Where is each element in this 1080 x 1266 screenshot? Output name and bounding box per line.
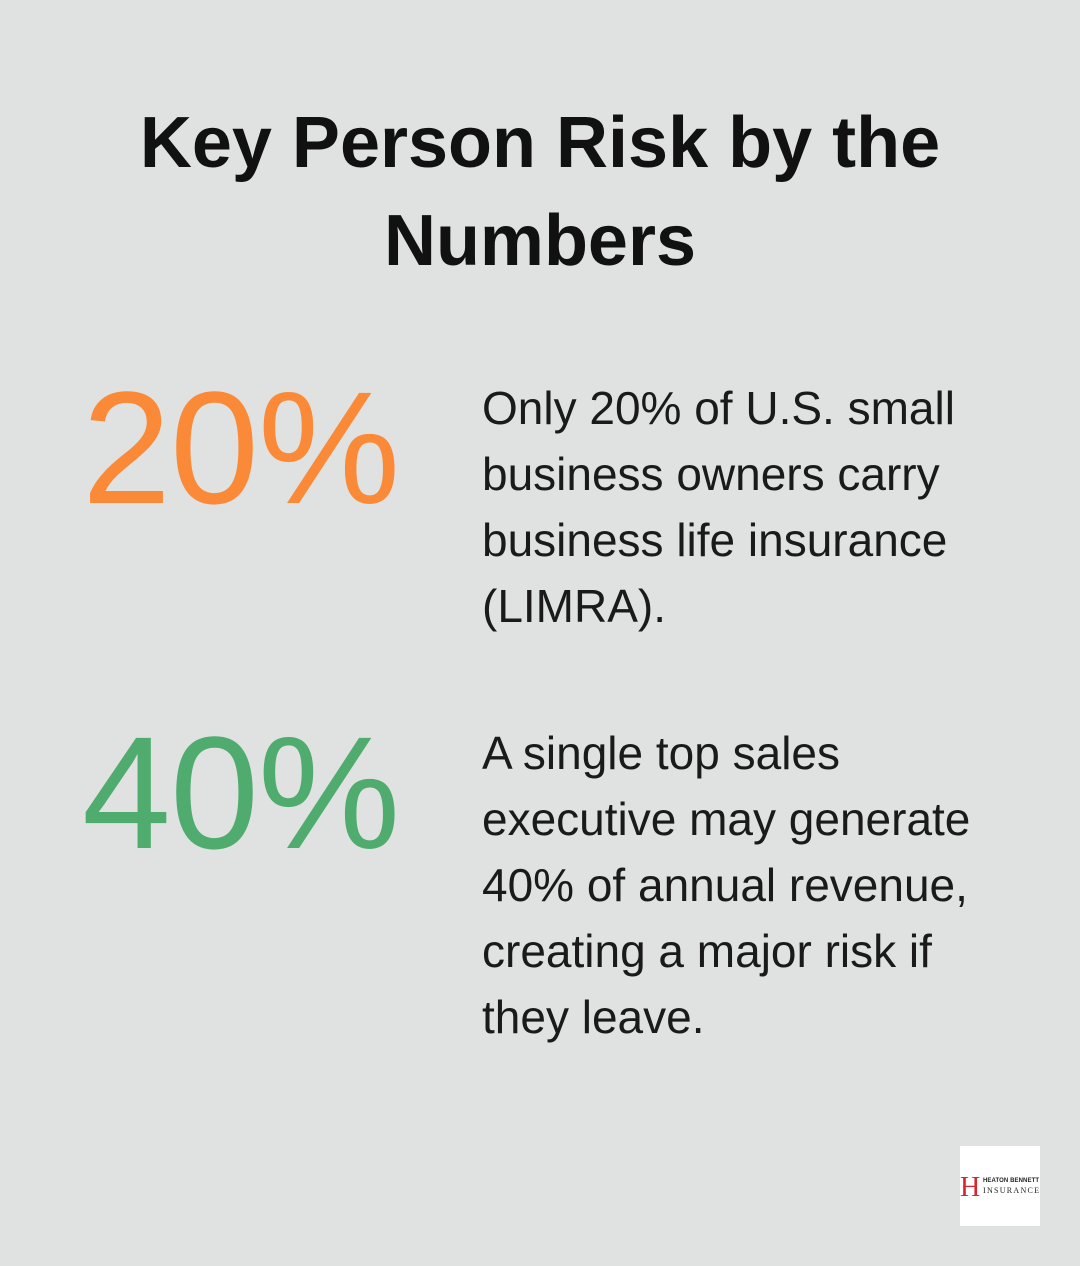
title: Key Person Risk by the	[140, 103, 940, 183]
stat: 20%: 20%	[82, 358, 399, 537]
logo	[960, 1146, 1040, 1226]
title: Numbers	[384, 201, 696, 281]
text: 20% description	[482, 382, 955, 632]
text: 40% description: A single top sales	[482, 727, 840, 779]
logo mark: H	[960, 1172, 980, 1203]
text: 20% description: (LIMRA).	[482, 580, 666, 632]
text: 20% description: business life insurance	[482, 514, 947, 566]
text: 40% description: executive may generate	[482, 793, 970, 845]
title	[140, 103, 940, 281]
logo mark: HEATON BENNETT	[983, 1178, 1039, 1184]
text: 40% description: creating a major risk if	[482, 925, 932, 977]
text: 20% description: Only 20% of U.S. small	[482, 382, 955, 434]
text: 40% description: they leave.	[482, 991, 704, 1043]
stat: 40%: 40%	[82, 703, 399, 882]
text: 40% description	[482, 727, 970, 1043]
text: 40% description: 40% of annual revenue,	[482, 859, 968, 911]
logo mark	[960, 1172, 1039, 1203]
logo mark: INSURANCE	[983, 1186, 1039, 1195]
text: 20% description: business owners carry	[482, 448, 940, 500]
